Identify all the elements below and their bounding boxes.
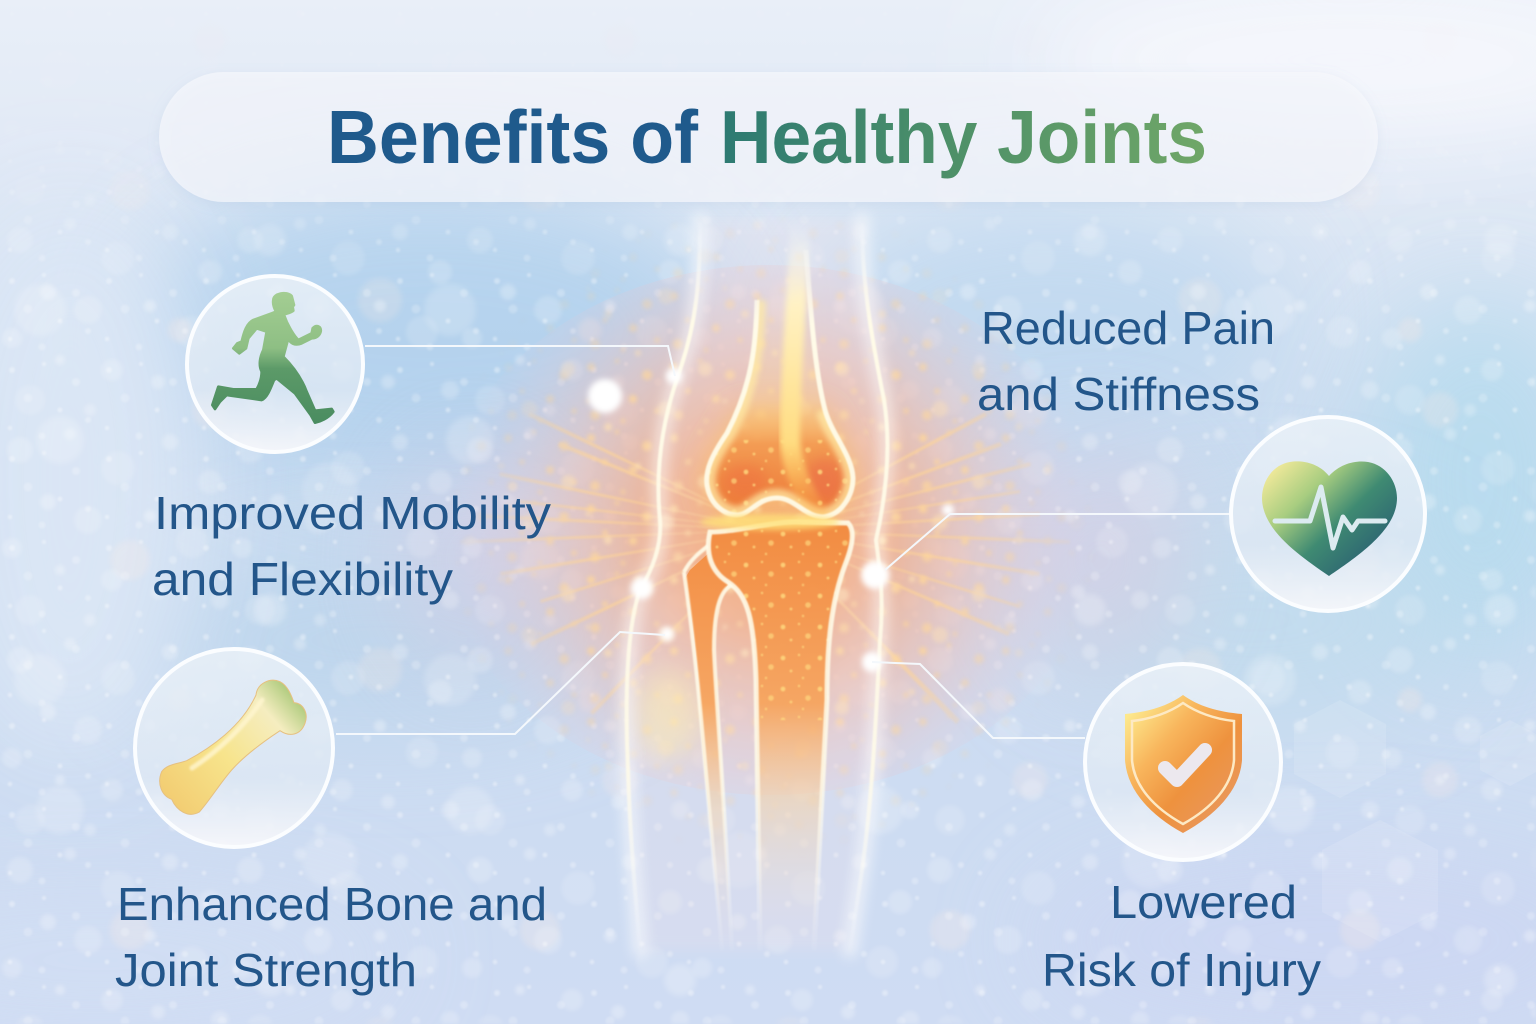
icon: bone: [135, 649, 333, 847]
text: enhanced bone strength: [115, 878, 547, 996]
soft body tint: [627, 220, 888, 950]
text: lowered risk: [1042, 876, 1321, 996]
femur: [700, 220, 860, 520]
title text: [327, 95, 1207, 179]
sunburst glow behind the knee: [462, 224, 1070, 806]
text: reduced pain: Reduced Pain: [981, 302, 1275, 354]
text: enhanced bone strength: Joint Strength: [115, 944, 417, 996]
title text: Healthy Joints: [720, 95, 1207, 179]
knee illustration: [588, 220, 954, 950]
text: lowered risk: Risk of Injury: [1042, 944, 1321, 996]
text: improved mobility: Improved Mobility: [154, 487, 551, 539]
text: improved mobility: and Flexibility: [152, 553, 453, 605]
icon: runner: [187, 276, 363, 452]
connector lines: [336, 346, 1230, 738]
text: reduced pain: [977, 302, 1275, 420]
icon: shield: [1085, 664, 1281, 860]
glowing nodes: [588, 368, 954, 672]
tibia and fibula: [684, 514, 860, 950]
text: improved mobility: [152, 487, 551, 605]
leg outline: [627, 220, 888, 950]
title banner: [159, 72, 1378, 202]
text: reduced pain: and Stiffness: [977, 368, 1260, 420]
text: lowered risk: Lowered: [1110, 876, 1297, 928]
text: enhanced bone strength: Enhanced Bone and: [117, 878, 547, 930]
title text: Benefits of: [327, 95, 699, 179]
icon: heart: [1231, 417, 1425, 611]
